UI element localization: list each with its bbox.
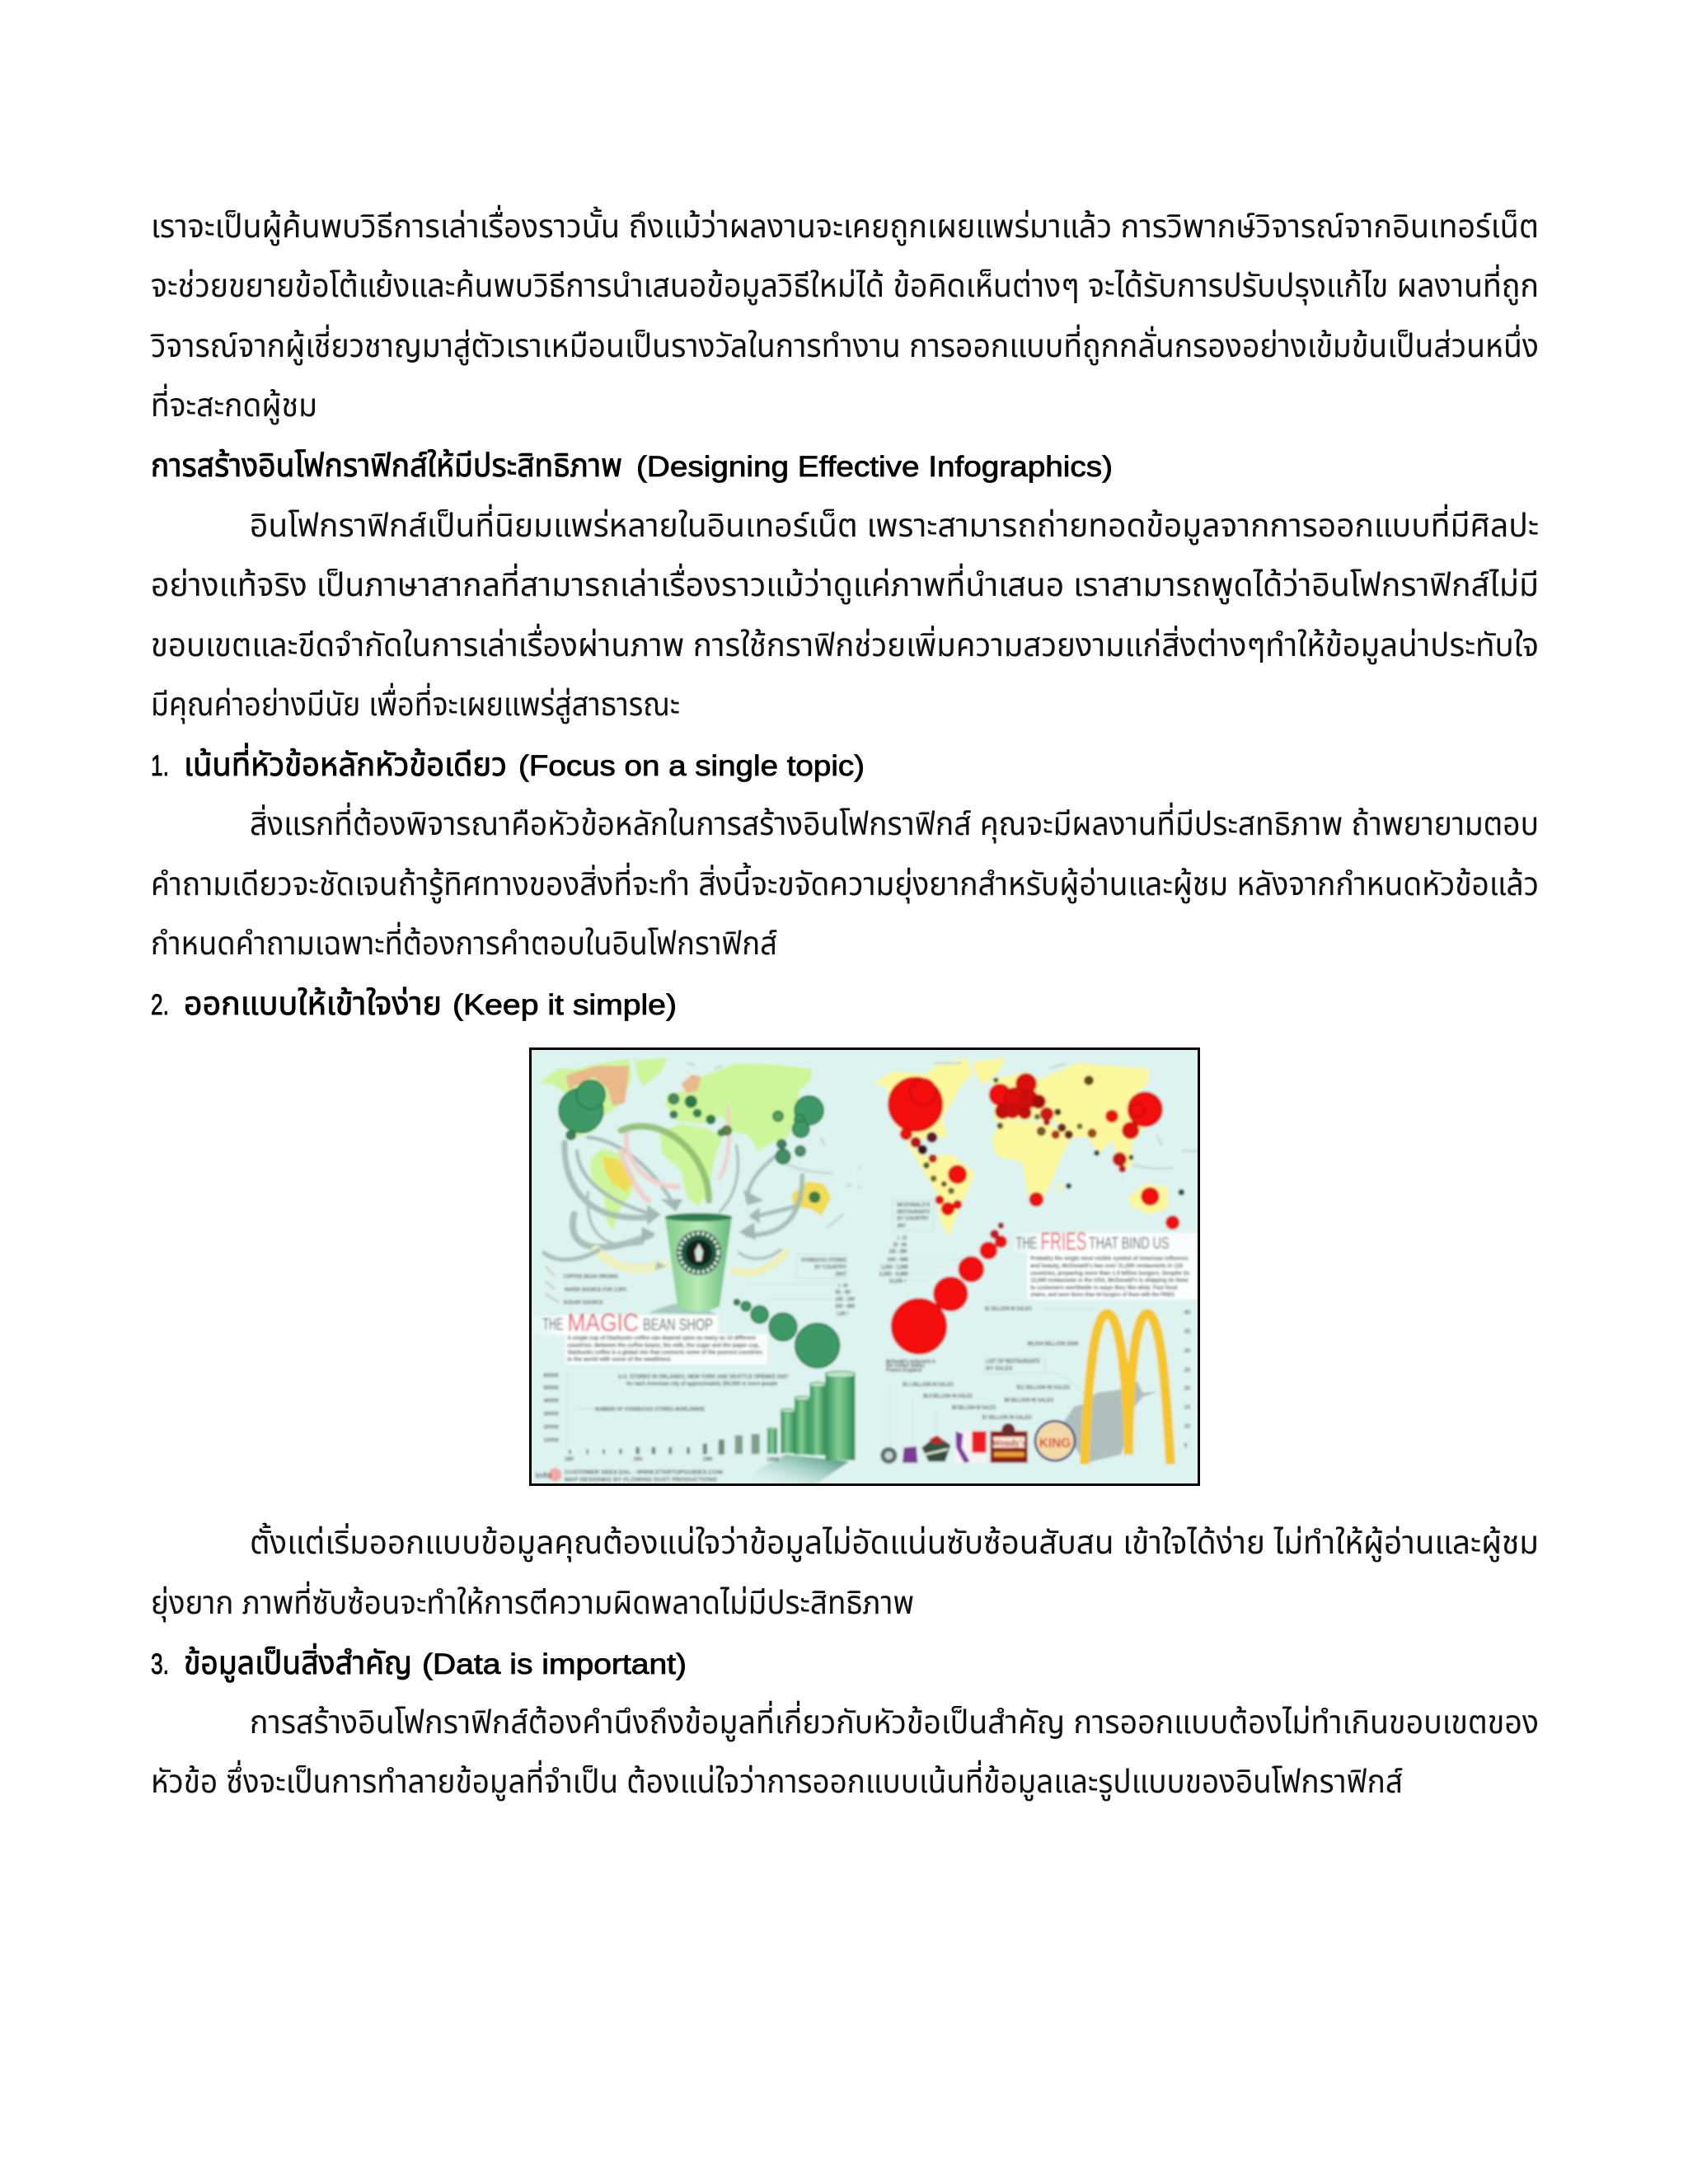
logo: pizza hut [921,1436,950,1461]
chart: starbucks stores per year: 1999 [767,1455,779,1463]
paragraph: single topic [151,802,1539,962]
paragraph: simple design: ยุ่งยาก ภาพที่ซับซ้อนจะทำให้การตีความผิดพลาดไม่มีประสิทธิภาพ [151,1581,914,1622]
credit: infographic source: MAP DESIGNED BY FLOWING DUST PRODUCTIONS [565,1476,717,1483]
chart: starbucks stores per year: 1987 [565,1455,574,1462]
bubble scale: starbucks [734,1300,839,1367]
paragraph: simple design [151,1522,1539,1622]
title: the magic bean shop [536,1312,719,1335]
heading: data is important: ข้อมูลเป็นสิ่งสำคัญ [184,1643,412,1682]
chart: starbucks stores per year: 1991 [633,1455,643,1462]
text block: fries description: chains, and more times than 64 burgers of them with the FRIES [1030,1291,1175,1298]
heading: focus on a single topic: เน้นที่หัวข้อหลักหัวข้อเดียว [184,743,507,783]
credit: infographic source: CUSTOMER SEES DAL - WWW.STARTUPGUIDES.COM [565,1469,723,1476]
legend: mcdonalds by country: 1 - 24 [897,1234,907,1241]
legend: mcdonalds ranges continued: 10,000 + [889,1277,907,1285]
chart: starbucks stores per year: for each American city of approximately 250,000 or more people [626,1380,777,1387]
credit: infographic source [535,1468,723,1483]
chart: starbucks stores per year: NUMBER OF STARBUCKS STORES WORLDWIDE [595,1405,705,1413]
title: the fries that bind us [1015,1231,1198,1254]
chart: starbucks stores per year: 1995 [703,1455,712,1462]
heading: data is important [151,1643,687,1682]
labels: fast food revenue: $11 BILLION IN SALES [1016,1383,1070,1390]
bubble scale upper part [991,1223,1006,1247]
legend: mcdonalds ranges continued: 300 - 999 [888,1256,908,1263]
legend: mcdonalds ranges continued: 1,000 - 2,999 [880,1263,908,1270]
title: the magic bean shop: BEAN SHOP [643,1315,713,1334]
heading: focus on a single topic: 1. [151,750,169,782]
axis: right numbers [1184,1308,1190,1449]
axis: right numbers: 25 [1184,1366,1190,1373]
paragraph: data: หัวข้อ ซึ่งจะเป็นการทำลายข้อมูลที่จำเป็น ต้องแน่ใจว่าการออกแบบเน้นที่ข้อมูลและรูปแบบของอินโฟกราฟิกส์ [151,1760,1403,1801]
labels: fast food revenue: $1 BILLION IN SALES [985,1305,1032,1312]
paragraph: opening: ที่จะสะกดผู้ชม [151,383,317,424]
labels: fast food revenue [885,1305,1080,1421]
heading: focus on a single topic: (Focus on a single topic) [518,750,865,782]
axis: right numbers: 5 [1184,1441,1188,1449]
paragraph: infographics popularity: อินโฟกราฟิกส์เป็นที่นิยมแพร่หลายในอินเทอร์เน็ต เพราะสามารถถ่ายทอดข้อมูลจากการออกแบบที่มีศิลปะ [250,504,1539,545]
chart: starbucks stores per year [543,1371,855,1486]
text block: fries description: countries, preparing more than 1.5 billion burgers. Despite its [1030,1269,1189,1277]
markers: mcdonalds restaurants by country [889,1074,1184,1229]
legend: mcdonalds ranges continued: 3,000 - 9,999 [879,1270,908,1277]
logo: subway [880,1447,897,1464]
axis: right numbers: 35 [1184,1328,1190,1335]
labels: fast food revenue: McDonald's restaurants in [886,1357,935,1365]
labels: fast food revenue: $8 BILLION IN SALES [952,1404,996,1411]
legend: stores by country: 50 - 99 [835,1288,851,1296]
paragraph: opening [150,204,1539,424]
page [150,204,1538,1802]
legend: mcdonalds by country [889,1200,934,1254]
axis: right numbers: 15 [1184,1403,1190,1410]
labels: fast food revenue: $6,034 BILLION 2006 [1028,1340,1078,1347]
chart: starbucks stores per year: 1000 [543,1436,559,1443]
text block: magic bean description: countries. Between the coffee beans, the milk, the sugar and the paper cup, [567,1341,760,1348]
panel: lower left starbucks content [532,1250,855,1486]
legend: coffee sourcing: COFFEE BEAN ORIGINS [563,1272,618,1280]
legend: coffee sourcing [546,1267,626,1306]
legend: coffee sourcing: SUGAR SOURCE [563,1299,603,1306]
labels: fast food revenue: $6.9 BILLION IN SALES [923,1392,973,1399]
legend: mcdonalds ranges continued [879,1256,909,1284]
shape: afghanistan silhouette [1063,1382,1158,1463]
title: the magic bean shop: THE [542,1315,563,1333]
paragraph: infographics popularity [151,504,1539,724]
paragraph: infographics popularity: ขอบเขตและขีดจำกัดในการเล่าเรื่องผ่านภาพ การใช้กราฟิกช่วยเพิ่มความสวยงามแก่สิ่งต่างๆทำให้ข้อมูลน่าประทับใจ [151,623,1539,664]
labels: fast food revenue: $5.1 BILLION IN SALES [903,1380,954,1388]
title: the fries that bind us: THAT BIND US [1089,1234,1169,1253]
paragraph: simple design: ตั้งแต่เริ่มออกแบบข้อมูลคุณต้องแน่ใจว่าข้อมูลไม่อัดแน่นซับซ้อนสับสน เข้าใจได้ง่าย ไม่ทำให้ผู้อ่านและผู้ชม [250,1522,1539,1562]
text block: fries description [1028,1252,1199,1300]
labels: fast food revenue: $8 BILLION IN SALES [1004,1396,1053,1404]
text block: fries description: to customers worldwide in ways they like what. Fast food [1030,1284,1177,1291]
axis: right numbers: 30 [1184,1347,1190,1354]
paragraph: single topic: กำหนดคำถามเฉพาะที่ต้องการคำตอบในอินโฟกราฟิกส์ [151,921,777,962]
heading: focus on a single topic [151,743,865,783]
logo: golden arches [1085,1314,1170,1465]
logo: taco bell [903,1446,917,1463]
chart: starbucks stores per year: 5000 [543,1384,559,1391]
text block: fries description: and beauty, McDonald's has over 31,000 restaurants in 119 [1030,1262,1183,1269]
text block: magic bean description: Starbucks coffee is a global mix that connects some of the poorest countries [567,1348,762,1356]
legend: mcdonalds by country: RESTAURANTS [897,1207,930,1215]
paragraph: single topic: คำถามเดียวจะชัดเจนถ้ารู้ทิศทางของสิ่งที่จะทำ สิ่งนี้จะขจัดความยุ่งยากสำหรับผู้อ่านและผู้ชม หลังจากกำหนดหัวข้อแล้ว [151,862,1539,903]
infographic image: magic bean shop and fries that bind us [529,1047,1200,1486]
chart: starbucks stores per year: 4000 [543,1397,559,1404]
paragraph: data [151,1700,1539,1801]
paragraph: infographics popularity: มีคุณค่าอย่างมีนัย เพื่อที่จะเผยแพร่สู่สาธารณะ [151,682,680,724]
panel: lower right mcdonalds content [879,1223,1199,1465]
labels: fast food revenue: $7 BILLION IN SALES [982,1413,1032,1421]
text block: magic bean description: A single cup of Starbucks coffee can depend upon as many as 14 different [567,1334,756,1342]
legend: stores by country: 1,000 + [837,1310,849,1317]
heading: keep it simple [151,987,677,1022]
legend: mcdonalds by country: 2007 [897,1222,906,1230]
coffee cup: starbucks [664,1213,732,1312]
logo: wendys: Wendy's [992,1439,1026,1449]
heading: keep it simple: (Keep it simple) [452,989,677,1021]
logo: wendys [991,1423,1028,1463]
paragraph: infographics popularity: อย่างแท้จริง เป็นภาษาสากลที่สามารถเล่าเรื่องราวแม้ว่าดูแค่ภาพที่นำเสนอ เราสามารถพูดได้ว่าอินโฟกราฟิกส์ไม่มี [151,563,1539,604]
legend: stores by country: 1 - 49 [838,1282,847,1289]
legend: mcdonalds by country: BY COUNTRY [897,1215,929,1222]
title: the magic bean shop: MAGIC [567,1309,639,1337]
axis: right numbers: 20 [1184,1385,1190,1392]
axis: right numbers: 40 [1184,1308,1190,1315]
heading: keep it simple: 2. [151,989,169,1021]
logo: burger king [1034,1420,1076,1462]
legend: stores by country: 100 - 199 [835,1296,855,1303]
title: the fries that bind us: FRIES [1041,1228,1086,1256]
labels: fast food revenue: France England [886,1366,921,1373]
text block: magic bean description [565,1333,767,1365]
chart: starbucks stores per year: 2000 [543,1422,559,1430]
legend: mcdonalds by country: 25 - 99 [893,1240,907,1248]
paragraph: opening: เราจะเป็นผู้ค้นพบวิธีการเล่าเรื่องราวนั้น ถึงแม้ว่าผลงานจะเคยถูกเผยแพร่มาแล้ว การวิพากษ์วิจารณ์จากอินเทอร์เน็ต [151,204,1539,246]
markers: starbucks stores by country [559,1080,823,1202]
chart: starbucks stores per year: 3000 [543,1410,559,1418]
text block: fries description: Probably the single most visible symbol of American influence [1030,1254,1189,1262]
chart: starbucks stores per year: 6000 [543,1371,559,1379]
legend: stores by country: 200 - 999 [835,1302,855,1310]
heading: designing effective infographics [151,448,1113,484]
paragraph: opening: วิจารณ์จากผู้เชี่ยวชาญมาสู่ตัวเราเหมือนเป็นรางวัลในการทำงาน การออกแบบที่ถูกกลั่นกรองอย่างเข้มข้นเป็นส่วนหนึ่ง [150,324,1539,365]
text block: magic bean description: in the world with some of the wealthiest. [567,1356,672,1363]
heading: data is important: (Data is important) [422,1648,687,1680]
legend: stores by country [797,1254,856,1317]
labels: fast food revenue: LIST OF RESTAURANTS [987,1357,1040,1365]
title: the fries that bind us: THE [1016,1234,1037,1253]
bubble scale: mcdonalds [892,1242,996,1354]
heading: designing effective infographics: การสร้างอินโฟกราฟิกส์ให้มีประสิทธิภาพ [151,448,622,484]
arrows: coffee flows [565,1107,802,1247]
heading: keep it simple: ออกแบบให้เข้าใจง่าย [184,987,442,1022]
panel: mcdonalds world map [857,1057,1199,1256]
axis: right numbers: 10 [1184,1422,1190,1430]
paragraph: single topic: สิ่งแรกที่ต้องพิจารณาคือหัวข้อหลักในการสร้างอินโฟกราฟิกส์ คุณจะมีผลงานที่มีประสทธิภาพ ถ้าพยายามตอบ [250,802,1539,843]
image background [529,1047,1200,1486]
logo: burger king: KING [1039,1436,1071,1451]
logo: kfc [954,1432,987,1463]
legend: mcdonalds by country: 100 - 299 [889,1247,907,1254]
labels: fast food revenue: BY SALES [987,1364,1012,1371]
legend: coffee sourcing: PAPER SOURCE FOR CUPS [565,1286,626,1293]
legend: stores by country: 2007 [835,1270,846,1277]
legend: stores by country: BY COUNTRY [814,1263,846,1270]
heading: data is important: 3. [151,1648,169,1680]
heading: designing effective infographics: (Designing Effective Infographics) [636,451,1113,483]
legend: stores by country: STARBUCKS STORES [801,1256,846,1263]
chart: starbucks stores per year: U.S. STORES IN ORLANDO, NEW YORK AND SEATTLE OPENED 2007 [618,1373,789,1380]
panel: starbucks world map [538,1057,851,1247]
text block: fries description: 13,000 restaurants in the USA, McDonald's is shipping its fame [1030,1277,1189,1284]
labels: fast food revenue: the United States [886,1361,925,1369]
legend: mcdonalds by country: MCDONALD'S [897,1201,930,1208]
paragraph: data: การสร้างอินโฟกราฟิกส์ต้องคำนึงถึงข้อมูลที่เกี่ยวกับหัวข้อเป็นสำคัญ การออกแบบต้องไม่ทำเกินขอบเขตของ [250,1700,1539,1741]
image frame [531,1048,1198,1485]
credit: infographic source: info [535,1471,551,1480]
paragraph: opening: จะช่วยขยายข้อโต้แย้งและค้นพบวิธีการนำเสนอข้อมูลวิธีใหม่ได้ ข้อคิดเห็นต่างๆ จะได้รับการปรับปรุงแก้ไข ผลงานที่ถูก [151,264,1539,305]
